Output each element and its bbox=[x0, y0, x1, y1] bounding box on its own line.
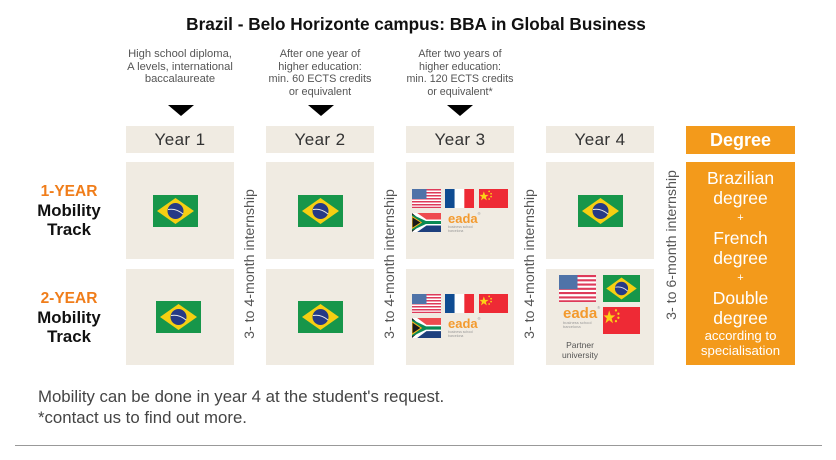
entry requirement: year 1: baccalaureate bbox=[145, 73, 215, 85]
internship label: after year 2: 3- to 4-month internship bbox=[382, 189, 398, 339]
arrow: year 2 bbox=[308, 105, 334, 116]
footnote text: Mobility can be done in year 4 at the student's request. bbox=[38, 387, 444, 406]
panel: degree outcomes: degree bbox=[713, 188, 768, 208]
panel: degree outcomes: Brazilian bbox=[707, 168, 774, 188]
panel: degree outcomes: specialisation bbox=[701, 343, 780, 358]
entry requirement: year 3: or equivalent* bbox=[427, 86, 493, 98]
panel: degree outcomes: degree bbox=[713, 308, 768, 328]
panel: degree outcomes bbox=[686, 162, 795, 365]
entry requirement: year 2: or equivalent bbox=[289, 86, 351, 98]
entry requirement: year 3: After two years of bbox=[418, 48, 502, 60]
arrow: year 1 bbox=[168, 105, 194, 116]
track label: 2-year mobility: Mobility bbox=[37, 308, 101, 327]
panel: track 1 year 3 bbox=[406, 162, 514, 259]
panel: track 1 year 2 bbox=[266, 162, 374, 259]
panel: degree outcomes: + bbox=[737, 212, 744, 224]
entry requirement: year 2: higher education: bbox=[278, 61, 362, 73]
panel: degree outcomes: Double bbox=[713, 288, 768, 308]
internship label: after year 3: 3- to 4-month internship bbox=[522, 189, 538, 339]
heading: year 2 bbox=[266, 126, 374, 153]
track label: 1-year mobility: Track bbox=[47, 220, 91, 239]
arrow: year 3 bbox=[447, 105, 473, 116]
panel: track 2 year 4: Partner bbox=[566, 340, 594, 350]
entry requirement: year 3 bbox=[407, 48, 514, 98]
entry requirement: year 2: min. 60 ECTS credits bbox=[269, 73, 371, 85]
panel: track 2 year 3: eada® bbox=[448, 316, 481, 331]
heading: year 3: Year 3 bbox=[435, 130, 485, 149]
entry requirement: year 2: After one year of bbox=[280, 48, 360, 60]
panel: track 2 year 4: barcelona bbox=[563, 324, 581, 329]
track label: 2-year mobility: 2-YEAR bbox=[41, 290, 97, 307]
panel: track 1 year 3: eada® bbox=[448, 211, 481, 226]
panel: track 2 year 2 bbox=[266, 269, 374, 365]
track label: 1-year mobility: 1-YEAR bbox=[41, 183, 97, 200]
entry requirement: year 3: higher education: bbox=[419, 61, 501, 73]
footnote text bbox=[38, 387, 444, 426]
entry requirement: year 3: min. 120 ECTS credits bbox=[407, 73, 513, 85]
internship label: after year 1: 3- to 4-month internship bbox=[242, 189, 258, 339]
heading: year 4 bbox=[546, 126, 654, 153]
panel: track 1 year 1 bbox=[126, 162, 234, 259]
heading: year 4: Year 4 bbox=[575, 130, 625, 149]
heading: year 1 bbox=[126, 126, 234, 153]
panel: track 2 year 4 bbox=[546, 269, 654, 365]
panel: degree outcomes: French bbox=[713, 228, 768, 248]
entry requirement: year 1 bbox=[127, 48, 233, 85]
panel: track 1 year 3: barcelona bbox=[448, 229, 463, 233]
heading: year 2: Year 2 bbox=[295, 130, 345, 149]
panel: track 2 year 3 bbox=[406, 269, 514, 365]
panel: degree outcomes: according to bbox=[705, 328, 776, 343]
track label: 1-year mobility: Mobility bbox=[37, 201, 101, 220]
panel: track 1 year 4 bbox=[546, 162, 654, 259]
panel: track 2 year 4: business school bbox=[563, 320, 591, 325]
heading: degree bbox=[686, 126, 795, 154]
heading: degree: Degree bbox=[710, 130, 771, 150]
panel: track 2 year 4: eada® bbox=[563, 305, 600, 322]
track label: 2-year mobility: Track bbox=[47, 327, 91, 346]
track label: 2-year mobility bbox=[37, 290, 101, 346]
panel: degree outcomes: + bbox=[737, 272, 744, 284]
heading: year 3 bbox=[406, 126, 514, 153]
footnote text: *contact us to find out more. bbox=[38, 408, 247, 426]
panel: track 1 year 3: business school bbox=[448, 225, 473, 229]
entry requirement: year 1: A levels, international bbox=[127, 61, 233, 73]
panel: track 2 year 3: barcelona bbox=[448, 334, 463, 338]
panel: degree outcomes: degree bbox=[713, 248, 768, 268]
heading: year 1: Year 1 bbox=[155, 130, 205, 149]
track label: 1-year mobility bbox=[37, 183, 101, 239]
panel: track 2 year 1 bbox=[126, 269, 234, 365]
title: Brazil - Belo Horizonte campus: BBA in Global Business bbox=[186, 14, 646, 34]
internship label: after year 4: 3- to 6-month internship bbox=[664, 170, 680, 320]
panel: track 2 year 3: business school bbox=[448, 330, 473, 334]
entry requirement: year 2 bbox=[269, 48, 372, 98]
entry requirement: year 1: High school diploma, bbox=[128, 48, 232, 60]
panel: track 2 year 4: university bbox=[562, 350, 598, 360]
